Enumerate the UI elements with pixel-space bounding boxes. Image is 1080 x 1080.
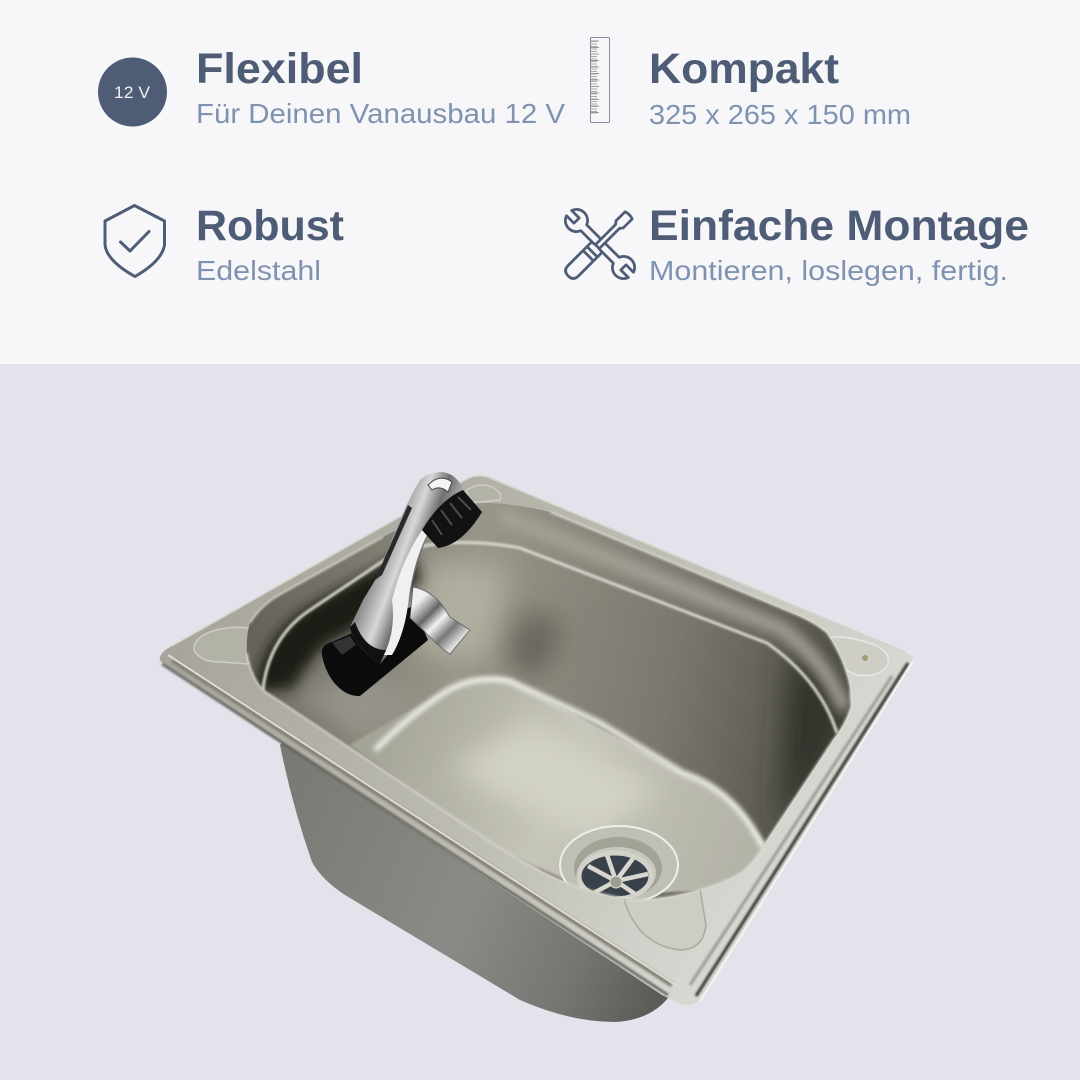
wall shading [255,550,845,830]
icon: 12 V badge [98,58,167,126]
sink body exterior [280,720,680,1022]
faucet spout [350,472,463,664]
heading: Flexibel: Flexibel [196,45,363,93]
heading: Kompakt: Kompakt [649,45,839,93]
faucet lever [410,587,470,654]
icon: crossed wrench and screwdriver [561,205,639,283]
feature: Kompakt [590,38,911,130]
feature: Einfache Montage [561,202,1029,286]
icon: shield with check [105,206,164,276]
sink rim [160,476,913,1005]
text: Edelstahl: Edelstahl [196,255,321,286]
illustration: stainless steel sink with faucet [160,472,913,1022]
drain [560,826,678,904]
basin opening edge [247,512,851,900]
icon: ruler [590,38,610,122]
faucet black base [322,606,428,696]
text: dimensions: 325 x 265 x 150 mm [649,99,911,130]
icon: 12 V badge: 12 V [114,84,150,102]
corner tabs [194,485,888,950]
brand mark [862,655,868,661]
upper background panel [0,0,1080,364]
faucet [322,472,482,696]
feature: Flexibel [98,45,565,129]
heading: Robust: Robust [196,202,344,250]
basin floor [350,678,770,895]
basin interior [240,495,860,905]
feature: Robust [105,202,344,286]
heading: Einfache Montage: Einfache Montage [649,202,1029,250]
faucet aerator [422,490,482,548]
text: Montieren, loslegen, fertig.: Montieren, loslegen, fertig. [649,255,1008,286]
bead highlight [262,543,837,733]
lower background panel [0,364,1080,1080]
text: Für Deinen Vanausbau 12 V: Für Deinen Vanausbau 12 V [196,98,565,129]
